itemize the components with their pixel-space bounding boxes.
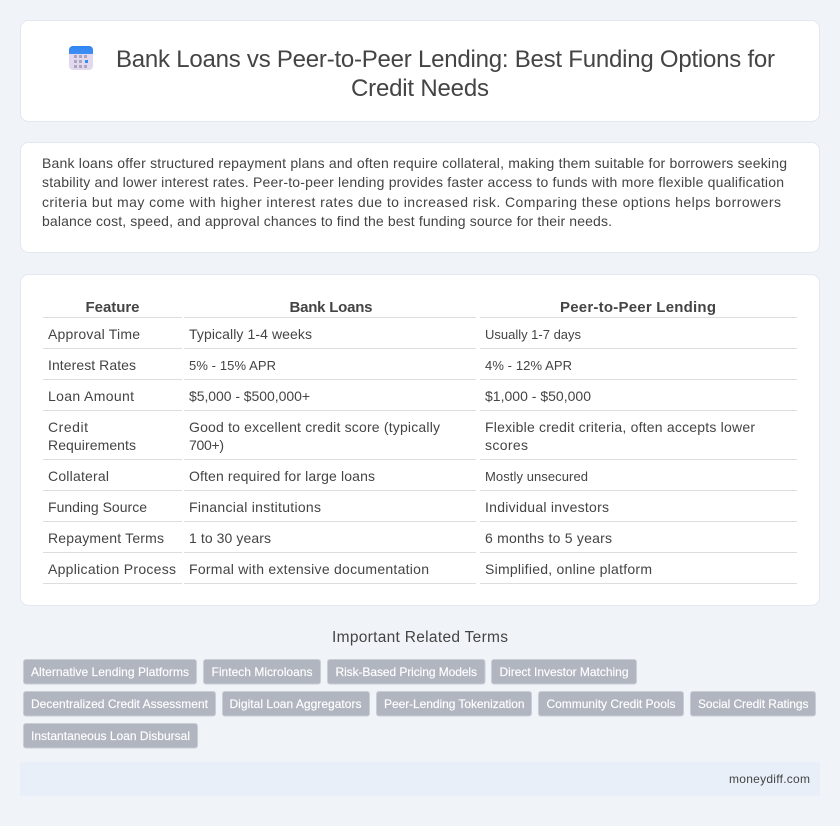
title: Credit Needs <box>351 75 489 102</box>
tag: Digital Loan Aggregators <box>230 697 362 711</box>
tag: Direct Investor Matching <box>500 665 628 679</box>
panel: comparison table <box>20 274 820 606</box>
panel: title card <box>20 20 820 122</box>
row: interest rates: 5% - 15% APR <box>189 358 276 373</box>
row: application process: Application Process <box>48 561 176 577</box>
row: credit requirements: Good to excellent credit score (typically <box>189 419 440 435</box>
table header <box>86 299 716 316</box>
row: repayment terms: 1 to 30 years <box>189 530 271 546</box>
row: credit requirements: Requirements <box>48 437 136 453</box>
row: collateral: Often required for large loans <box>189 468 375 484</box>
row: collateral: Collateral <box>48 468 109 484</box>
heading: important related terms: Important Related Terms <box>332 629 508 646</box>
table header: Feature <box>86 299 140 316</box>
panel: summary text: criteria but may come with higher interest rates due to increased risk. Comparing these options helps borrowers <box>42 194 781 210</box>
icon: calendar <box>69 46 93 70</box>
row: approval time <box>48 326 582 342</box>
tag <box>24 692 216 716</box>
row: approval time: Approval Time <box>48 326 140 342</box>
title <box>116 46 775 102</box>
table header: Bank Loans <box>290 299 372 316</box>
panel: summary text: stability and lower interest rates. Peer-to-peer lending provides faster access to funds with more flexible qualification <box>42 174 784 190</box>
tags: related terms <box>24 660 816 748</box>
panel: summary text: balance cost, speed, and approval chances to find the best funding source for their needs. <box>42 213 612 229</box>
row: interest rates <box>48 357 572 373</box>
row: funding source: Individual investors <box>485 499 609 515</box>
table header: Peer-to-Peer Lending <box>560 299 716 316</box>
tag: Alternative Lending Platforms <box>31 665 189 679</box>
row: repayment terms: 6 months to 5 years <box>485 530 612 546</box>
footer: moneydiff.com <box>729 772 810 786</box>
tag: Decentralized Credit Assessment <box>31 697 209 711</box>
tag <box>328 660 485 684</box>
tag <box>538 692 684 716</box>
row: collateral: Mostly unsecured <box>485 469 588 484</box>
row: funding source: Funding Source <box>48 499 147 515</box>
tag <box>222 692 370 716</box>
tag: Social Credit Ratings <box>698 697 808 711</box>
row: collateral <box>48 468 588 484</box>
row: interest rates: 4% - 12% APR <box>485 358 572 373</box>
row: funding source: Financial institutions <box>189 499 321 515</box>
panel: summary text: Bank loans offer structured repayment plans and often require collateral, making them suitable for borrowers seeking <box>42 155 787 171</box>
row: repayment terms <box>48 530 612 546</box>
title: Bank Loans vs Peer-to-Peer Lending: Best Funding Options for <box>116 46 775 73</box>
row: loan amount: $5,000 - $500,000+ <box>189 388 310 404</box>
tag <box>376 692 532 716</box>
tag <box>492 660 636 684</box>
row: funding source <box>48 499 609 515</box>
row: credit requirements: scores <box>485 437 528 453</box>
tag: Community Credit Pools <box>546 697 676 711</box>
tag: Peer-Lending Tokenization <box>384 697 524 711</box>
tag <box>690 692 816 716</box>
row: loan amount: Loan Amount <box>48 388 134 404</box>
tag: Risk-Based Pricing Models <box>336 665 477 679</box>
tag: Instantaneous Loan Disbursal <box>31 729 190 743</box>
footer <box>20 762 820 796</box>
tag <box>24 660 196 684</box>
panel: summary text <box>20 142 820 252</box>
tag: Fintech Microloans <box>212 665 312 679</box>
row: loan amount <box>48 388 591 404</box>
row: credit requirements <box>48 419 755 453</box>
tag <box>24 724 198 748</box>
row: loan amount: $1,000 - $50,000 <box>485 388 591 404</box>
row: credit requirements: Flexible credit criteria, often accepts lower <box>485 419 755 435</box>
row: application process: Formal with extensive documentation <box>189 561 429 577</box>
row: interest rates: Interest Rates <box>48 357 136 373</box>
tag <box>204 660 320 684</box>
row: application process <box>48 561 652 577</box>
row: application process: Simplified, online platform <box>485 561 652 577</box>
row: approval time: Typically 1-4 weeks <box>189 326 312 342</box>
row: approval time: Usually 1-7 days <box>485 327 582 342</box>
row: repayment terms: Repayment Terms <box>48 530 164 546</box>
row: credit requirements: Credit <box>48 419 88 435</box>
row: credit requirements: 700+) <box>189 437 224 453</box>
